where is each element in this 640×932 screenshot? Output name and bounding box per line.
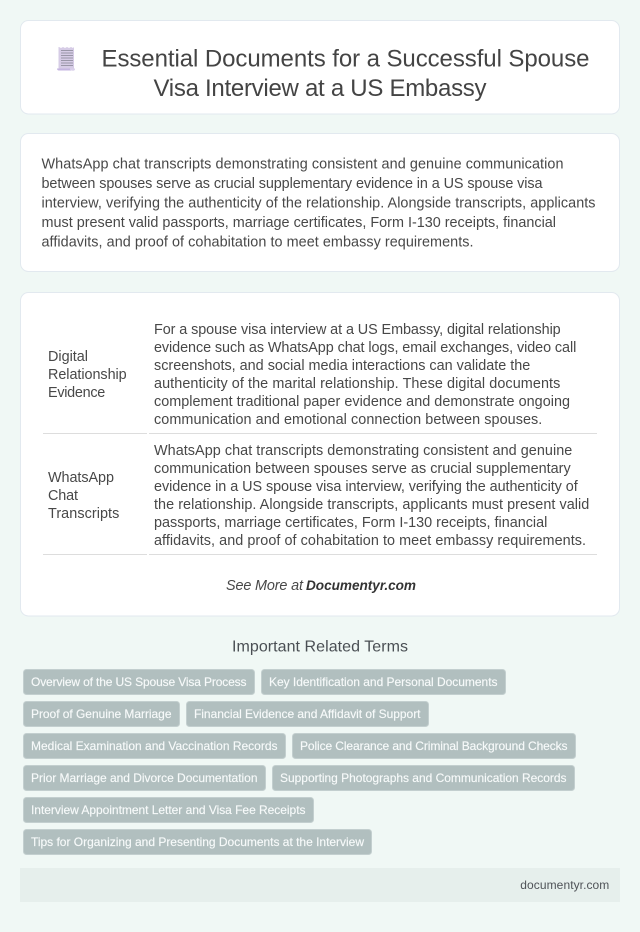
footer: documentyr.com — [520, 878, 609, 892]
row text: whatsapp chat transcripts: affidavits, and proof of cohabitation to meet embassy requirements. — [154, 533, 586, 549]
row label: digital relationship evidence: Evidence — [48, 385, 105, 401]
row text: digital relationship evidence — [154, 322, 576, 428]
row text: whatsapp chat transcripts: evidence in a US spouse visa interview, verifying the authenticity of — [154, 479, 579, 495]
tag: Proof of Genuine Marriage — [31, 707, 172, 721]
text block: summary — [42, 156, 596, 250]
tag: Tips for Organizing and Presenting Documents at the Interview — [31, 835, 364, 849]
tag — [262, 670, 506, 694]
row text: whatsapp chat transcripts: the relationship. Alongside transcripts, applicants must present valid — [154, 497, 589, 513]
row text: digital relationship evidence: complement traditional paper evidence and demonstrate ongoing — [154, 394, 570, 410]
panel: summary paragraph — [20, 134, 620, 272]
panel: title card — [20, 20, 620, 114]
tag: Interview Appointment Letter and Visa Fee Receipts — [31, 803, 306, 817]
row text: whatsapp chat transcripts: communication between spouses serve as crucial supplementary — [154, 461, 571, 477]
tag: Overview of the US Spouse Visa Process — [31, 675, 246, 689]
row text: whatsapp chat transcripts: passports, marriage certificates, Form I-130 receipts, financial — [154, 515, 547, 531]
tag: Medical Examination and Vaccination Records — [31, 739, 278, 753]
footer — [20, 868, 620, 902]
see more link: Documentyr.com — [306, 578, 416, 593]
row label: whatsapp chat transcripts: Transcripts — [48, 506, 119, 522]
title: Visa Interview at a US Embassy — [154, 75, 486, 102]
row text: whatsapp chat transcripts: WhatsApp chat transcripts demonstrating consistent and genuine — [154, 443, 572, 459]
row text: digital relationship evidence: screenshots, and social media interactions can validate the — [154, 358, 530, 374]
row text: digital relationship evidence: evidence such as WhatsApp chat logs, email exchanges, video call — [154, 340, 576, 356]
tag: Supporting Photographs and Communication Records — [280, 771, 566, 785]
row label: digital relationship evidence: Digital — [48, 349, 88, 365]
see more link: See More at — [226, 578, 304, 594]
tag — [272, 766, 574, 790]
heading: important related terms: Important Related Terms — [232, 639, 408, 656]
row label: whatsapp chat transcripts — [48, 470, 119, 522]
row text: digital relationship evidence: communication and emotional connection between spouses. — [154, 412, 542, 428]
text block: summary: WhatsApp chat transcripts demonstrating consistent and genuine communication — [42, 156, 564, 172]
text block: summary: must present valid passports, marriage certificates, Form I-130 receipts, financial — [42, 215, 556, 231]
row label: whatsapp chat transcripts: Chat — [48, 488, 78, 504]
see more link — [226, 578, 416, 594]
tag: Key Identification and Personal Documents — [269, 675, 498, 689]
title: Essential Documents for a Successful Spouse — [102, 46, 590, 72]
panel: related term tags — [24, 670, 576, 854]
tag — [24, 670, 254, 694]
tag: Prior Marriage and Divorce Documentation — [31, 771, 258, 785]
text block: summary: between spouses serve as crucial supplementary evidence in a US spouse visa — [42, 176, 542, 192]
tag — [24, 830, 372, 854]
title — [102, 46, 590, 102]
table row: digital relationship evidence — [48, 322, 576, 428]
text block: summary: interview, verifying the authenticity of the relationship. Alongside transcripts, applicants — [42, 195, 596, 211]
row text: digital relationship evidence: For a spouse visa interview at a US Embassy, digital relationship — [154, 322, 561, 338]
tag — [24, 734, 286, 758]
tag — [292, 734, 576, 758]
row label: digital relationship evidence — [48, 349, 127, 401]
text block: summary: affidavits, and proof of cohabitation to meet embassy requirements. — [42, 234, 474, 250]
row text: whatsapp chat transcripts — [154, 443, 589, 549]
icon: document scroll — [57, 47, 75, 71]
row text: digital relationship evidence: authenticity of the marital relationship. These digital documents — [154, 376, 560, 392]
row label: whatsapp chat transcripts: WhatsApp — [48, 470, 114, 486]
tag: Police Clearance and Criminal Background Checks — [300, 739, 568, 753]
tag — [186, 702, 428, 726]
row label: digital relationship evidence: Relationship — [48, 367, 127, 383]
panel: document table — [20, 292, 620, 616]
tag — [24, 798, 314, 822]
tag — [24, 702, 180, 726]
table row: whatsapp chat transcripts — [48, 443, 589, 549]
tag: Financial Evidence and Affidavit of Support — [194, 707, 421, 721]
tag — [24, 766, 266, 790]
